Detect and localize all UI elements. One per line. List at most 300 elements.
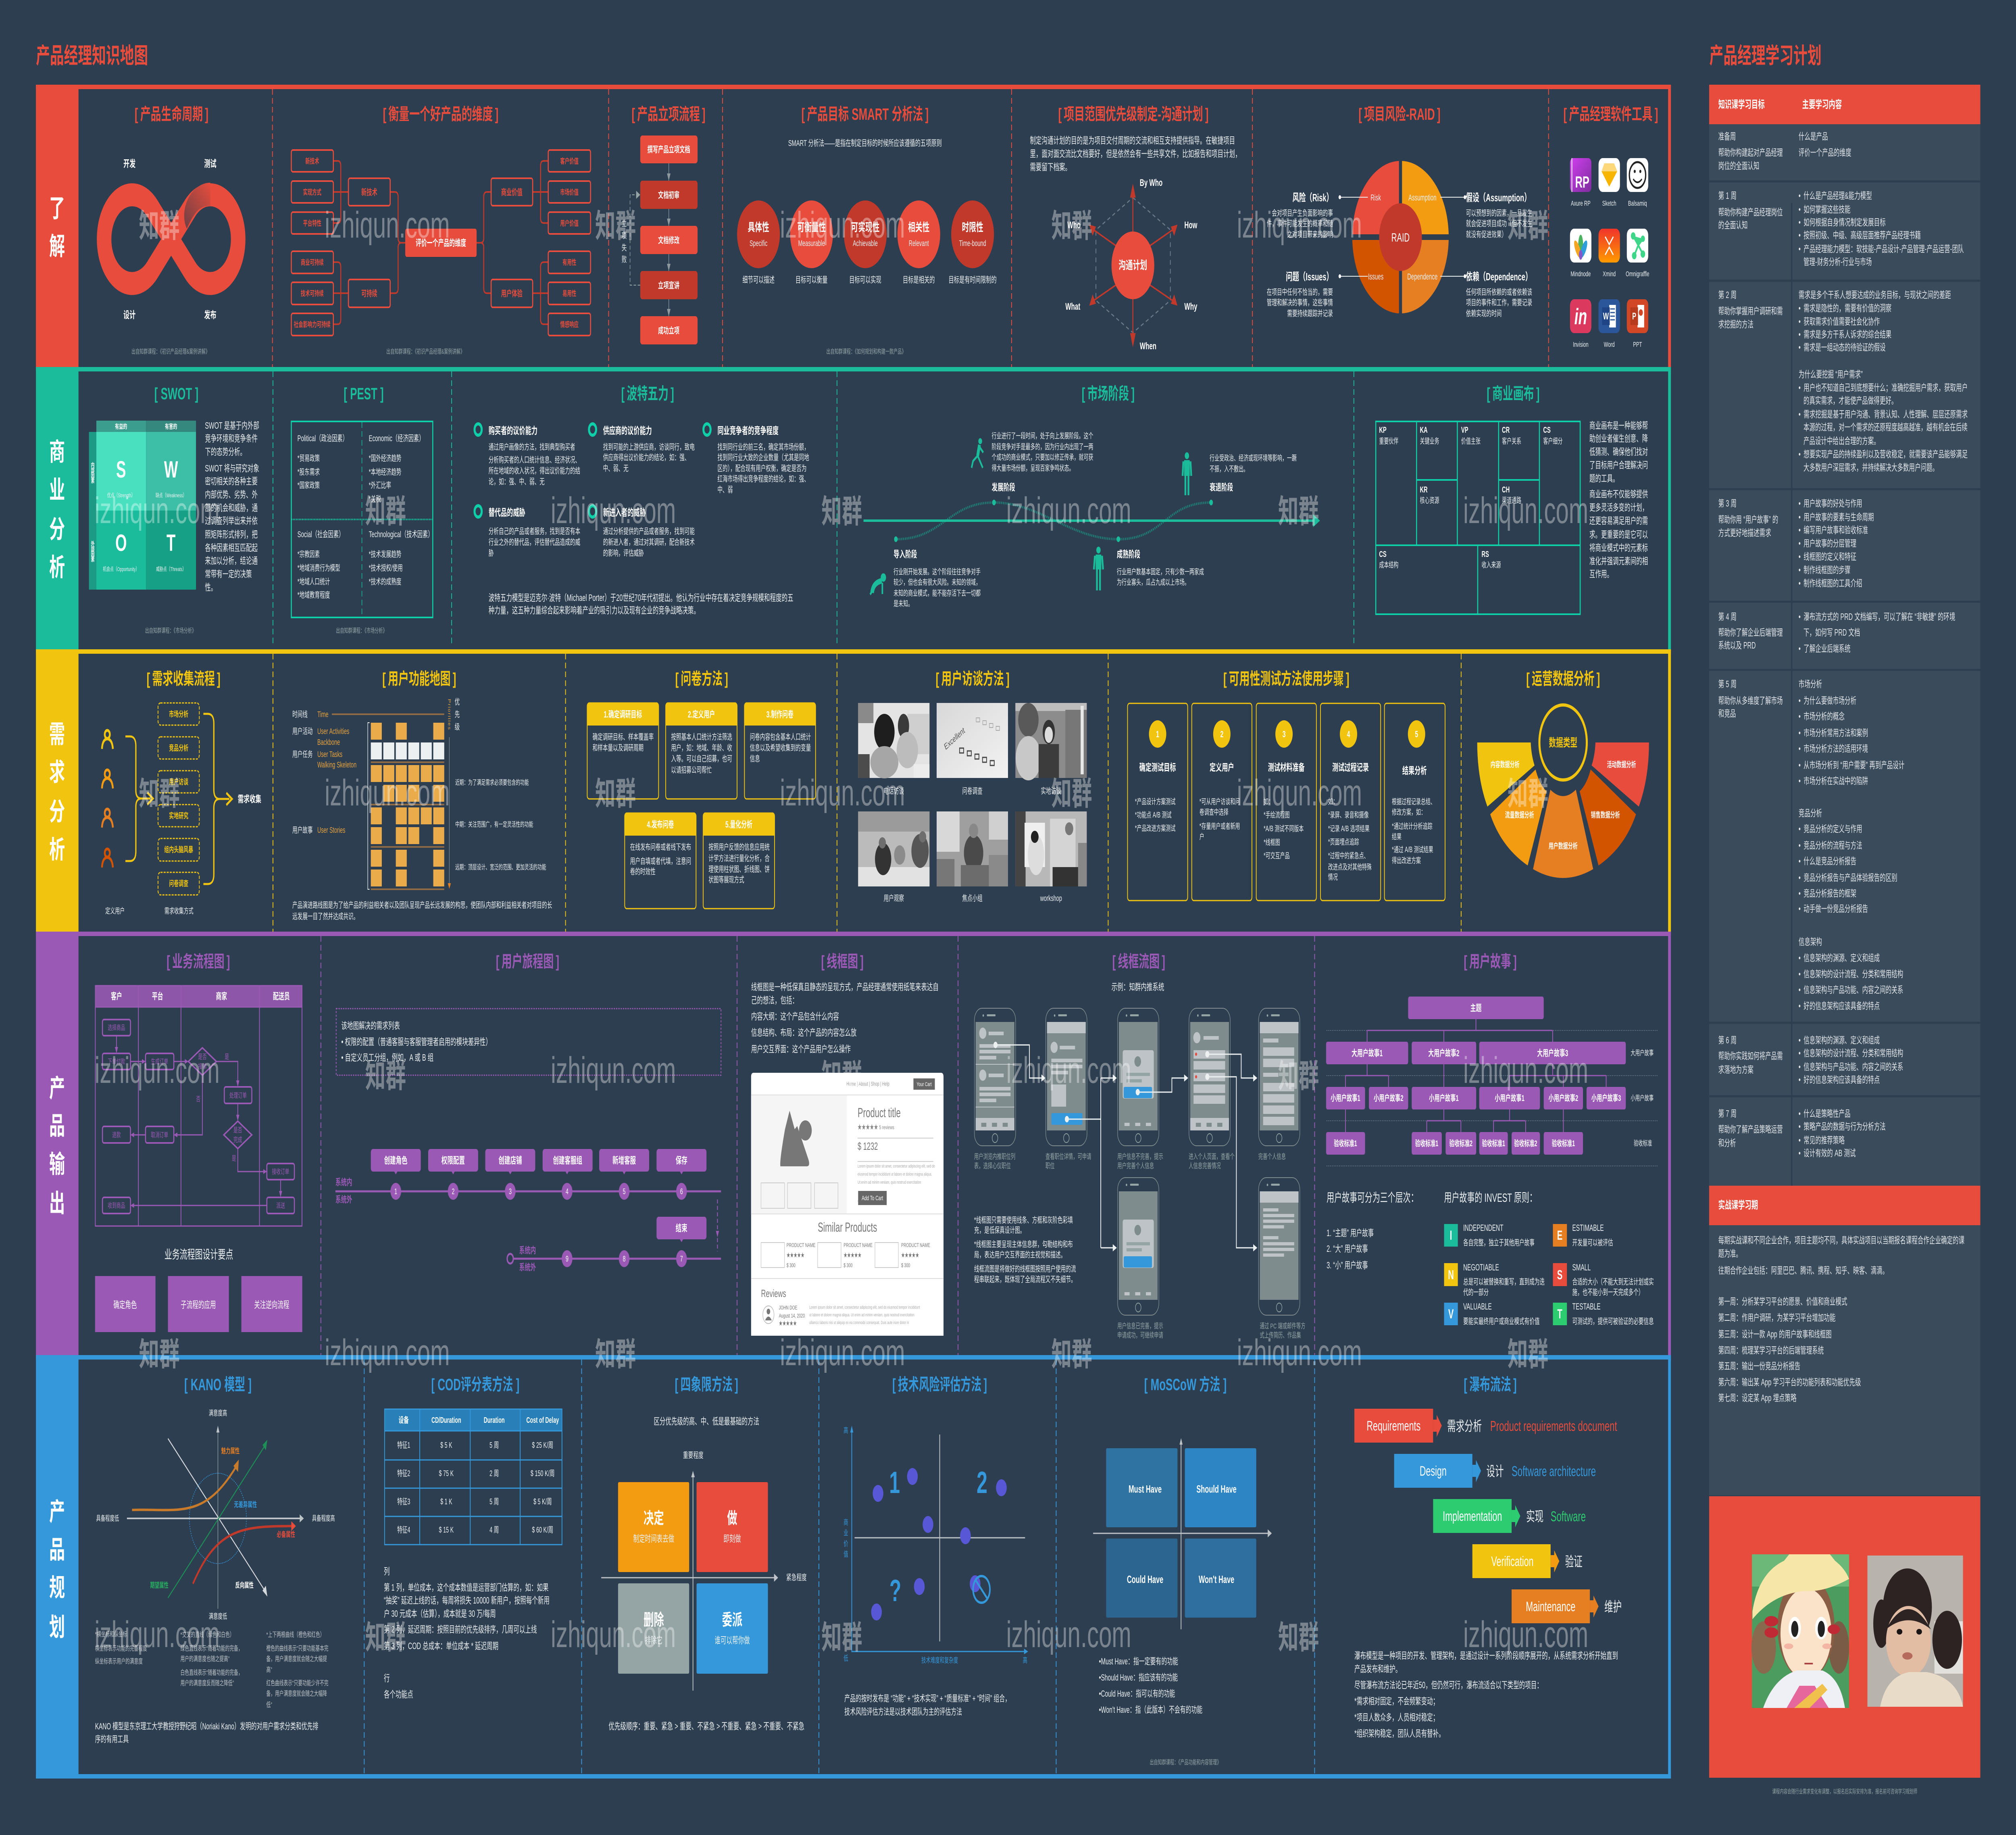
panel: Porter's five forces: [ 波特五力 ]	[621, 385, 674, 403]
panel: questionnaire method: 计学方法进行量化分析，合	[708, 854, 770, 863]
photo: field interview	[1015, 703, 1087, 780]
icon: PPT	[1627, 299, 1648, 333]
panel: user story map: 近期：为了满足需求必须要包含的功能	[455, 778, 529, 787]
photo: phone interview	[858, 703, 929, 778]
table: right column content: • 信息架构的渊源、定义和组成	[1799, 1035, 1880, 1046]
panel: SMART analysis: Specific	[750, 239, 767, 248]
panel: business flow chart: 取消订单	[151, 1131, 168, 1139]
table: right column content: • 竞品分析报告的框架	[1799, 888, 1856, 899]
panel: COD scoring table: 各个功能点	[384, 1689, 413, 1700]
watermarks: 知群	[595, 1337, 636, 1373]
wireframe sample page: ★★★★★	[779, 1320, 797, 1327]
panel: MoSCoW: Should Have	[1196, 1483, 1237, 1495]
panel: red image banner	[1709, 1496, 1981, 1778]
panel: business flow chart: 是否	[198, 1053, 207, 1061]
table: left column goals: 求挖掘的方法	[1718, 319, 1754, 330]
wireframe sample page: ★★★★★	[787, 1252, 804, 1259]
panel: SMART analysis: SMART 分析法——是指在制定目标的时候所应该遵循的五项原则	[788, 138, 942, 148]
panel: SWOT: 竞争环境和竞争条件	[205, 434, 258, 444]
panel: Porter's five forces: 通过用户画像的方法，找到典型购买者	[489, 442, 575, 452]
panel: SWOT: 性。	[205, 582, 217, 593]
panel: Porter's five forces: 论，如：强、中、弱、无	[489, 477, 545, 486]
panel: RAID: Dependence	[1407, 272, 1437, 282]
panel: product dimensions mind map: 新技术	[361, 188, 377, 197]
panel: KANO model	[95, 1376, 335, 1744]
panel: RAID: RAID	[1391, 231, 1410, 244]
watermarks: 知群	[1278, 1620, 1319, 1656]
panel: KANO model: 满意度低	[209, 1612, 227, 1621]
panel: product dimensions mind map: 市场价值	[560, 188, 579, 197]
panel: user stories: 小用户故事3	[1591, 1093, 1621, 1103]
wireframe sample page: ★★★★★	[843, 1252, 862, 1259]
panel: user stories: 总是可以被替换和重写，直到成为迭	[1463, 1277, 1545, 1287]
panel: usability test steps: *A/B 测试不同版本	[1264, 824, 1304, 833]
panel: market stages: 不振，入不敷出。	[1210, 464, 1248, 473]
panel: project initiation flow: 成功立项	[658, 326, 680, 336]
panel: wireflow: 进入个人页面，查看个	[1189, 1153, 1235, 1161]
panel: requirements collection flow: 组内头脑风暴	[164, 845, 193, 854]
sidebar label: 出	[49, 1189, 65, 1217]
panel: KANO model: 低”	[267, 1701, 272, 1709]
panel: SMART analysis: 细节可以描述	[742, 275, 775, 285]
panel: Porter's five forces: 行业之外的替代品，评估替代品造成的威	[489, 538, 580, 547]
watermarks: 知群	[365, 1620, 406, 1656]
panel: questionnaire method: 信息以及希望收集到的变量	[750, 743, 811, 753]
panel: KANO model: 反向属性	[235, 1581, 254, 1590]
panel: waterfall: Design	[1420, 1464, 1447, 1479]
panel: business flow chart: 是否	[233, 1127, 242, 1134]
panel: requirements collection flow: 需求收集方式	[165, 907, 194, 915]
panel: Porter's five forces: 种力量，这五种力量综合起来影响着产业的吸引力以及现有企业的竞争战略决策。	[489, 605, 700, 616]
table: right column content: 市场分析	[1799, 679, 1822, 690]
panel: usability test steps: 测试材料准备	[1268, 762, 1305, 773]
panel: user story map: 远期：顶层设计、宽泛的范围、更加灵活的功能	[455, 863, 546, 872]
watermarks: izhiqun.com	[325, 1332, 450, 1373]
panel: user stories: 合适的大小（不能大到无法计划或实	[1572, 1277, 1654, 1287]
panel: SWOT	[89, 385, 259, 634]
panel: questionnaire method: 4.发布问卷	[647, 819, 674, 830]
panel: market stages: 为行业寡头，瓜占九成以上市场。	[1117, 578, 1189, 587]
panel: user stories	[1326, 953, 1658, 1326]
panel: technical risk assessment: 产品的按时发布是 “功能” + “技术实现” + “质量标准” + “时间” 组合，	[844, 1693, 1010, 1704]
panel: SWOT: 各种因素相互匹配起	[205, 543, 258, 553]
panel: SMART analysis: Achievable	[853, 239, 878, 248]
table: right column content: • 什么是竞品分析报告	[1799, 856, 1856, 867]
panel: RAID: 在项目中任何不恰当的，需要	[1267, 288, 1333, 297]
panel: SWOT: 部	[91, 546, 95, 553]
panel: wireflow: 用户浏览内推职位列	[974, 1153, 1015, 1161]
panel: user stories: 开发量可以被评估	[1572, 1238, 1613, 1247]
sidebar label: 需	[49, 720, 65, 748]
panel: PEST: 出自知群课程：《市场分析》	[336, 626, 387, 634]
watermarks: izhiqun.com	[325, 772, 450, 813]
panel: MoSCoW: Won't Have	[1199, 1573, 1234, 1585]
panel: usability test steps: *通过统计分析追踪	[1392, 822, 1433, 831]
panel: market stages: 行业刚开始发展。这个阶段往往竞争对手	[893, 567, 981, 576]
panel: wireflow: 线框流图是将做好的线框图按照用户使用的流	[974, 1264, 1076, 1274]
panel: usability test steps: 根据过程记录总结、	[1392, 797, 1435, 806]
panel: user interview methods: 问卷调查	[962, 786, 983, 796]
panel: RAID: 假设（Assumption）	[1466, 192, 1531, 204]
panel: usability test steps: *可从用户访谈和问	[1200, 797, 1240, 806]
panel: communication plan: [ 项目范围优先级制定-沟通计划 ]	[1058, 105, 1209, 124]
INVEST blocks: I	[1450, 1228, 1452, 1243]
panel: user journey map: 1	[394, 1187, 397, 1196]
panel: MoSCoW: •Won't Have：指（此版本）不会有的功能	[1099, 1705, 1202, 1715]
panel: user journey map: 结束	[676, 1223, 687, 1234]
panel: product dimensions mind map	[292, 105, 591, 355]
panel: SWOT: 部的机会和威胁，通	[205, 503, 258, 513]
panel: KANO model: *交叉的直线（绿色和白色）	[181, 1630, 234, 1639]
watermarks: 知群	[1278, 494, 1319, 530]
panel: business canvas: 低猜测、确保他们找对	[1589, 447, 1648, 457]
panel: questionnaire method: 5.量化分析	[725, 819, 752, 830]
panel: PEST: *国家政策	[298, 481, 320, 490]
table: left column goals: 帮助你用 “用户故事” 的	[1718, 515, 1778, 525]
title: learning plan: 产品经理学习计划	[1710, 43, 1822, 68]
watermarks: 知群	[139, 1337, 180, 1373]
panel: market stages: 阶段竞争对手是最多的，因为行业内出现了一两	[992, 442, 1093, 451]
panel: technical risk assessment: 商	[843, 1518, 848, 1527]
table: left column goals: 帮助你从多维度了解市场	[1718, 696, 1783, 706]
panel: questionnaire method: 1.确定调研目标	[604, 709, 642, 719]
panel: questionnaire method: 卷的时效性	[630, 867, 656, 876]
sidebar label: 品	[49, 1112, 65, 1140]
panel: usability test steps: *产品设计方案测试	[1135, 797, 1176, 806]
panel: waterfall: Maintenance	[1526, 1599, 1575, 1614]
panel: KANO model: 期望属性	[150, 1581, 169, 1590]
panel: user journey map: 创建角色	[384, 1155, 408, 1166]
table: right column content: 信息架构	[1799, 937, 1822, 947]
panel: wireflow: 人信息完善情况	[1189, 1162, 1221, 1170]
panel: Porter's five forces: 胁	[489, 548, 494, 558]
panel: questionnaire method: [ 问卷方法 ]	[675, 670, 728, 688]
panel: communication plan: What	[1065, 302, 1081, 312]
table: right column content: • 策略产品的数据与行为分析方法	[1799, 1122, 1886, 1132]
panel: RAID: 就没有促进效果）	[1466, 230, 1507, 239]
panel: project initiation flow: [ 产品立项流程 ]	[632, 105, 706, 124]
sidebar label: 解	[49, 232, 65, 260]
panel: requirements collection flow: 实地研究	[169, 811, 188, 820]
panel: COD scoring table: 第 1 列，单位成本，这个成本数值是运营部门估算的，如：如果	[384, 1583, 549, 1593]
panel: COD scoring table: 5 周	[489, 1441, 499, 1450]
table: right column content: • 制作线框图的工具介绍	[1799, 578, 1862, 589]
panel: SMART analysis: [ 产品目标 SMART 分析法 ]	[802, 105, 929, 124]
wireframe sample page: $ 300	[787, 1262, 796, 1269]
phone 2	[1046, 1008, 1087, 1146]
panel: SWOT: 照矩阵形式排列，把	[205, 530, 258, 540]
panel: technical risk assessment: 高	[1023, 1656, 1027, 1665]
practical course text: 第六周：输出某 App 学习平台的功能列表和功能优先级	[1718, 1377, 1861, 1388]
panel: business flow chart: 平台	[152, 991, 163, 1001]
panel: product life cycle: 设计	[123, 309, 135, 321]
panel: SWOT: 外	[91, 540, 95, 547]
panel: MoSCoW: •Could Have：指可以有的功能	[1099, 1689, 1175, 1699]
panel: user stories: 各自完整，独立于其他用户故事	[1463, 1238, 1535, 1247]
panel: communication plan: When	[1140, 341, 1156, 352]
table: right column content: • 编写用户故事和验收标准	[1799, 525, 1868, 536]
panel: SMART analysis: Time-bound	[959, 239, 986, 248]
panel: KANO model: [ KANO 模型 ]	[184, 1376, 252, 1394]
panel: user journey map: • 权限的配置（普通客服与客服管理者启用的模块差异性）	[341, 1037, 492, 1047]
watermarks: izhiqun.com	[1463, 490, 1588, 531]
panel: business canvas: CH	[1502, 485, 1510, 494]
panel: PM software tools: Invision	[1573, 340, 1589, 349]
panel: market stages: 衰退阶段	[1210, 482, 1233, 493]
panel: questionnaire method: 2.定义用户	[688, 709, 715, 719]
panel: KANO model: 白色直线表示“随着功能的完备，	[181, 1668, 243, 1677]
panel: business flow chart: 是	[225, 1053, 229, 1061]
panel: product dimensions mind map: 有用性	[562, 259, 576, 267]
watermarks: izhiqun.com	[551, 490, 676, 531]
table: right column content: • 设计有效的 AB 测试	[1799, 1148, 1856, 1159]
panel: wireflow	[974, 953, 1306, 1340]
panel: market stages: 发展阶段	[992, 482, 1015, 493]
table: left column goals: 和竞品	[1718, 709, 1736, 719]
panel: SMART analysis: Relevant	[909, 239, 929, 248]
panel: COD scoring table: 特征4	[397, 1525, 410, 1535]
panel: MoSCoW: [ MoSCoW 方法 ]	[1144, 1376, 1227, 1394]
table: right column content: 竞品分析	[1799, 808, 1822, 819]
panel: RAID: 件，事件可能发生的概率和随	[1267, 219, 1333, 228]
panel: product dimensions mind map: 用户体验	[501, 289, 523, 298]
table: right column content: • 需求是一组动态的待验证的假设	[1799, 342, 1886, 353]
practical course text: 第七周：设定某 App 埋点策略	[1718, 1393, 1797, 1403]
panel: PM software tools: PPT	[1633, 340, 1642, 349]
title: knowledge map: 产品经理知识地图	[36, 43, 148, 68]
panel: waterfall: 尽管瀑布流方法论已年近50，但仍然可行，瀑布流适合以下类型的项目：	[1354, 1680, 1543, 1691]
panel: learning plan table: 知识课学习目标	[1718, 98, 1765, 111]
panel: questionnaire method: 用户自填或者代填，注意问	[630, 857, 691, 866]
panel: user stories: 大用户故事3	[1537, 1048, 1568, 1058]
panel: MoSCoW: Must Have	[1129, 1483, 1162, 1495]
panel: usability test steps: 5	[1415, 729, 1418, 739]
panel: MoSCoW: •Must Have：指一定要有的功能	[1099, 1656, 1178, 1666]
panel: wireflow: 示例：知群内推系统	[1112, 982, 1164, 993]
panel: user journey map: 系统内	[335, 1177, 352, 1187]
panel: SWOT: [ SWOT ]	[154, 385, 198, 403]
panel: RAID: 会对项目产生负面影响的事	[1272, 209, 1333, 218]
panel: RAID: 需要持续跟踪并记录	[1287, 309, 1333, 318]
table: left column goals: 准备周	[1718, 131, 1736, 142]
panel: learning plan table	[1709, 85, 1981, 1495]
wireframe sample page: PRODUCT NAME	[787, 1242, 815, 1249]
panel: PEST: *贸易政策	[298, 454, 320, 463]
table: right column content: • 需求挖掘是基于用户沟通、背景认知、人性理解、层层还原需求	[1799, 409, 1968, 420]
icon: image placeholder	[780, 1111, 812, 1166]
practical course text: 往期合作企业包括：阿里巴巴、腾讯、携程、知乎、映客、滴滴。	[1718, 1266, 1888, 1276]
panel: Porter's five forces: 找到同行业的前三名，确定其市场份额，	[717, 442, 809, 452]
panel: wireflow: 用户信息已完善，提示	[1117, 1322, 1163, 1330]
table: right column content: 什么是产品	[1799, 131, 1828, 142]
panel: KANO model: 绿色直线表示“随着功能的完备，	[181, 1644, 243, 1653]
phone 7	[1258, 1178, 1300, 1315]
panel: user interview methods: 焦点小组	[962, 894, 983, 903]
panel: PM software tools: Sketch	[1602, 199, 1616, 208]
panel: product dimensions mind map: 新技术	[305, 157, 319, 166]
sidebar label: 析	[49, 836, 65, 863]
panel: product dimensions mind map: 技术可持续	[301, 289, 324, 298]
panel: usability test steps: *过程中的紧急点、	[1328, 851, 1369, 860]
watermarks: 知群	[1508, 1337, 1548, 1373]
panel: usability test steps: 测试过程记录	[1332, 762, 1369, 773]
panel: waterfall: 瀑布模型是一种项目的开发、管理架构，是通过设计一系列阶段顺序展开的，从系统需求分析开始直到	[1354, 1651, 1618, 1661]
panel: user journey map: 8	[623, 1254, 626, 1264]
panel: COD scoring table: $ 1 K	[440, 1497, 452, 1506]
table: left column goals: 帮助你了解企业后端管理	[1718, 628, 1783, 638]
table: right column content: • 什么是产品经理&能力模型	[1799, 191, 1872, 201]
table: right column content: • 好的信息架构应该具备的特点	[1799, 1075, 1880, 1085]
panel: COD scoring table: Cost of Delay	[526, 1416, 559, 1425]
panel: requirements collection flow	[102, 670, 261, 915]
icon: PPT: P	[1632, 311, 1636, 322]
icon: Sketch	[1599, 158, 1620, 192]
panel: PM software tools: Omnigraffle	[1626, 270, 1649, 278]
watermarks: 知群	[1051, 776, 1092, 812]
panel: business canvas: 互作用。	[1589, 569, 1613, 580]
panel: operations data analysis: 内容数据分析	[1491, 760, 1520, 769]
panel: wireflow: 充，是低保真设计图。	[974, 1226, 1025, 1235]
panel: waterfall	[1354, 1376, 1622, 1739]
panel: usability test steps: 确定测试目标	[1139, 761, 1176, 773]
panel: project initiation flow	[622, 105, 706, 344]
table: left column goals: 第 4 周	[1718, 612, 1737, 622]
panel: COD scoring table: $ 5 K/周	[533, 1497, 552, 1506]
panel: communication plan	[1030, 105, 1241, 352]
panel: user stories: 要能实最终用户或商业模式有价值	[1463, 1317, 1540, 1326]
panel: SMART analysis: 出自知群课程：《如何规划和构建一款产品》	[826, 347, 906, 355]
panel: SWOT: O	[115, 530, 127, 556]
panel: user story map: 时间线	[292, 710, 308, 719]
image: little girl photo	[1867, 1556, 1963, 1707]
panel: KANO model: 备，用户满意度就会随之大幅提	[267, 1654, 327, 1663]
panel: questionnaire method: 3.制作问卷	[766, 709, 793, 719]
panel: KANO model: 高”	[267, 1666, 272, 1674]
panel: business canvas: 助创业者催生创意、降	[1589, 434, 1648, 444]
panel: technical risk assessment: ?	[889, 1574, 901, 1608]
panel: COD scoring table: $ 60 K/周	[532, 1525, 553, 1535]
panel: operations data analysis: 活动数据分析	[1607, 760, 1636, 769]
panel: Porter's five forces: 购买者的议价能力	[489, 425, 537, 436]
icon: Xmind	[1599, 229, 1620, 263]
panel: SMART analysis	[737, 105, 997, 355]
wireframe sample page: Lorem ipsum dolor sit amet, consectetur adipiscing elit, sed do	[858, 1164, 935, 1168]
watermarks: izhiqun.com	[1006, 490, 1131, 531]
panel: user journey map: 创建店铺	[498, 1155, 522, 1166]
panel: user stories: TESTABLE	[1572, 1301, 1601, 1312]
watermarks: izhiqun.com	[95, 1050, 220, 1091]
panel: wireflow: 职位	[1045, 1162, 1055, 1170]
panel: market stages: 未知的商业模式，能不能存活下去一切都	[893, 589, 981, 598]
table: right column content: 本源的过程，对一个需求的还原程度越高越准，越有机会在后续	[1804, 422, 1968, 433]
panel: RAID	[1267, 105, 1532, 318]
panel: wireframe: 内容大纲：这个产品包含什么内容	[751, 1011, 839, 1022]
panel: product life cycle: 发布	[204, 309, 217, 321]
panel: user stories: [ 用户故事 ]	[1464, 953, 1517, 971]
panel: questionnaire method: 确定调研目标、样本覆盖率	[593, 732, 654, 742]
panel: questionnaire method: 以请招募公司帮忙	[671, 765, 712, 775]
panel: SWOT: 缺点（Weakness）	[156, 492, 186, 499]
panel: wireframe: [ 线框图 ]	[821, 953, 864, 971]
panel: user stories: 验收标准	[1634, 1139, 1652, 1148]
watermarks: izhiqun.com	[1237, 1332, 1362, 1373]
panel: waterfall: Software	[1551, 1509, 1586, 1524]
wireframe sample page: PRODUCT NAME	[901, 1242, 930, 1249]
watermarks: izhiqun.com	[1463, 1050, 1588, 1091]
panel: questionnaire method: 在线发布问卷或者线下发布	[630, 842, 691, 852]
INVEST blocks	[1444, 1224, 1567, 1325]
panel: business flow chart: 派送	[276, 1201, 285, 1210]
panel: user stories: 小用户故事2	[1549, 1093, 1578, 1103]
table: right column content: • 市场分析的概念	[1799, 711, 1845, 722]
panel: usability test steps: *录屏、录音和摄像	[1328, 811, 1369, 819]
panel: KANO model: 用户的满意度也随之提高”	[181, 1654, 229, 1663]
panel: PM software tools: Word	[1604, 340, 1615, 349]
panel: user journey map: 2	[452, 1187, 454, 1196]
practical course text: 第三周：设计一款 App 的用户故事和线框图	[1718, 1329, 1832, 1340]
panel: Porter's five forces: 分析购买者的人口统计信息、经济状况、	[489, 455, 580, 465]
panel: user journey map	[335, 953, 721, 1272]
panel: market stages: 行业进行了一段时间，处于向上发展阶段。这个	[992, 432, 1093, 440]
panel: market stages: 个成功的商业模式，只要加以修正传承，就可获	[992, 453, 1093, 462]
panel: business canvas: KA	[1420, 425, 1428, 435]
panel: wireflow: 用户完善个人信息	[1117, 1162, 1154, 1170]
panel: product dimensions mind map: 商业价值	[501, 188, 523, 197]
watermarks: 知群	[365, 494, 406, 530]
panel: wireflow: 申请成功，可继续申请	[1117, 1331, 1163, 1340]
panel: user stories: 主题	[1470, 1003, 1481, 1013]
panel: questionnaire method: 和样本量以及调研周期	[593, 743, 644, 753]
panel: market stages: 成熟阶段	[1117, 548, 1140, 560]
sidebar label: 析	[49, 553, 65, 581]
panel: user journey map: 权限配置	[442, 1155, 465, 1166]
panel: COD scoring table: 行	[384, 1673, 390, 1684]
panel: user interview methods: [ 用户访谈方法 ]	[936, 670, 1010, 688]
panel: PM software tools: Balsamiq	[1628, 199, 1647, 208]
table: right column content: • 信息架构的设计流程、分类和常用结构	[1799, 1048, 1903, 1059]
panel: user journey map: 该地图解决的需求列表	[341, 1021, 400, 1031]
icon: Invision	[1570, 299, 1591, 333]
panel: user story map: 远发展一目了然并达成共识。	[292, 912, 358, 921]
panel: Porter's five forces: 中、弱、无	[603, 464, 629, 473]
panel: user stories: 大用户故事2	[1428, 1048, 1460, 1058]
panel: user journey map: 5	[623, 1187, 626, 1196]
wireframe sample page: ★★★★★ 5 reviews	[858, 1124, 894, 1131]
panel: RAID: 问题（Issues）	[1286, 271, 1333, 283]
table: left column goals: 第 2 周	[1718, 290, 1737, 300]
icon: Word: W	[1603, 311, 1609, 322]
panel: waterfall: Verification	[1491, 1554, 1534, 1569]
panel: wireflow: 完善个人信息	[1258, 1153, 1286, 1161]
panel: product life cycle: 测试	[204, 158, 217, 169]
panel: PEST: *技术发展趋势	[369, 550, 402, 559]
panel: SWOT: 内部优势、劣势、外	[205, 490, 258, 500]
panel: wireflow: 程串联起来，既体现了全局流程又不失细节。	[974, 1275, 1076, 1284]
panel: RAID: Assumption	[1408, 193, 1436, 202]
sidebar label: 业	[49, 476, 65, 504]
panel: waterfall: Requirements	[1366, 1418, 1420, 1434]
panel: product dimensions mind map: 客户价值	[560, 157, 579, 166]
watermarks: 知群	[1508, 776, 1548, 812]
table: right column content: 需求是多个干系人想要达成的业务目标，与现状之间的差距	[1799, 290, 1951, 300]
row 5: 产品规划	[36, 1355, 1671, 1779]
panel: product life cycle: [ 产品生命周期 ]	[135, 105, 208, 124]
panel: technical risk assessment: [ 技术风险评估方法 ]	[892, 1376, 987, 1394]
panel: usability test steps: *功能点 A/B 测试	[1135, 811, 1172, 819]
panel: user stories: 验收标准1	[1482, 1139, 1505, 1148]
panel: usability test steps: *可交互产品	[1264, 851, 1290, 860]
panel: SMART analysis: 具体性	[748, 221, 769, 234]
